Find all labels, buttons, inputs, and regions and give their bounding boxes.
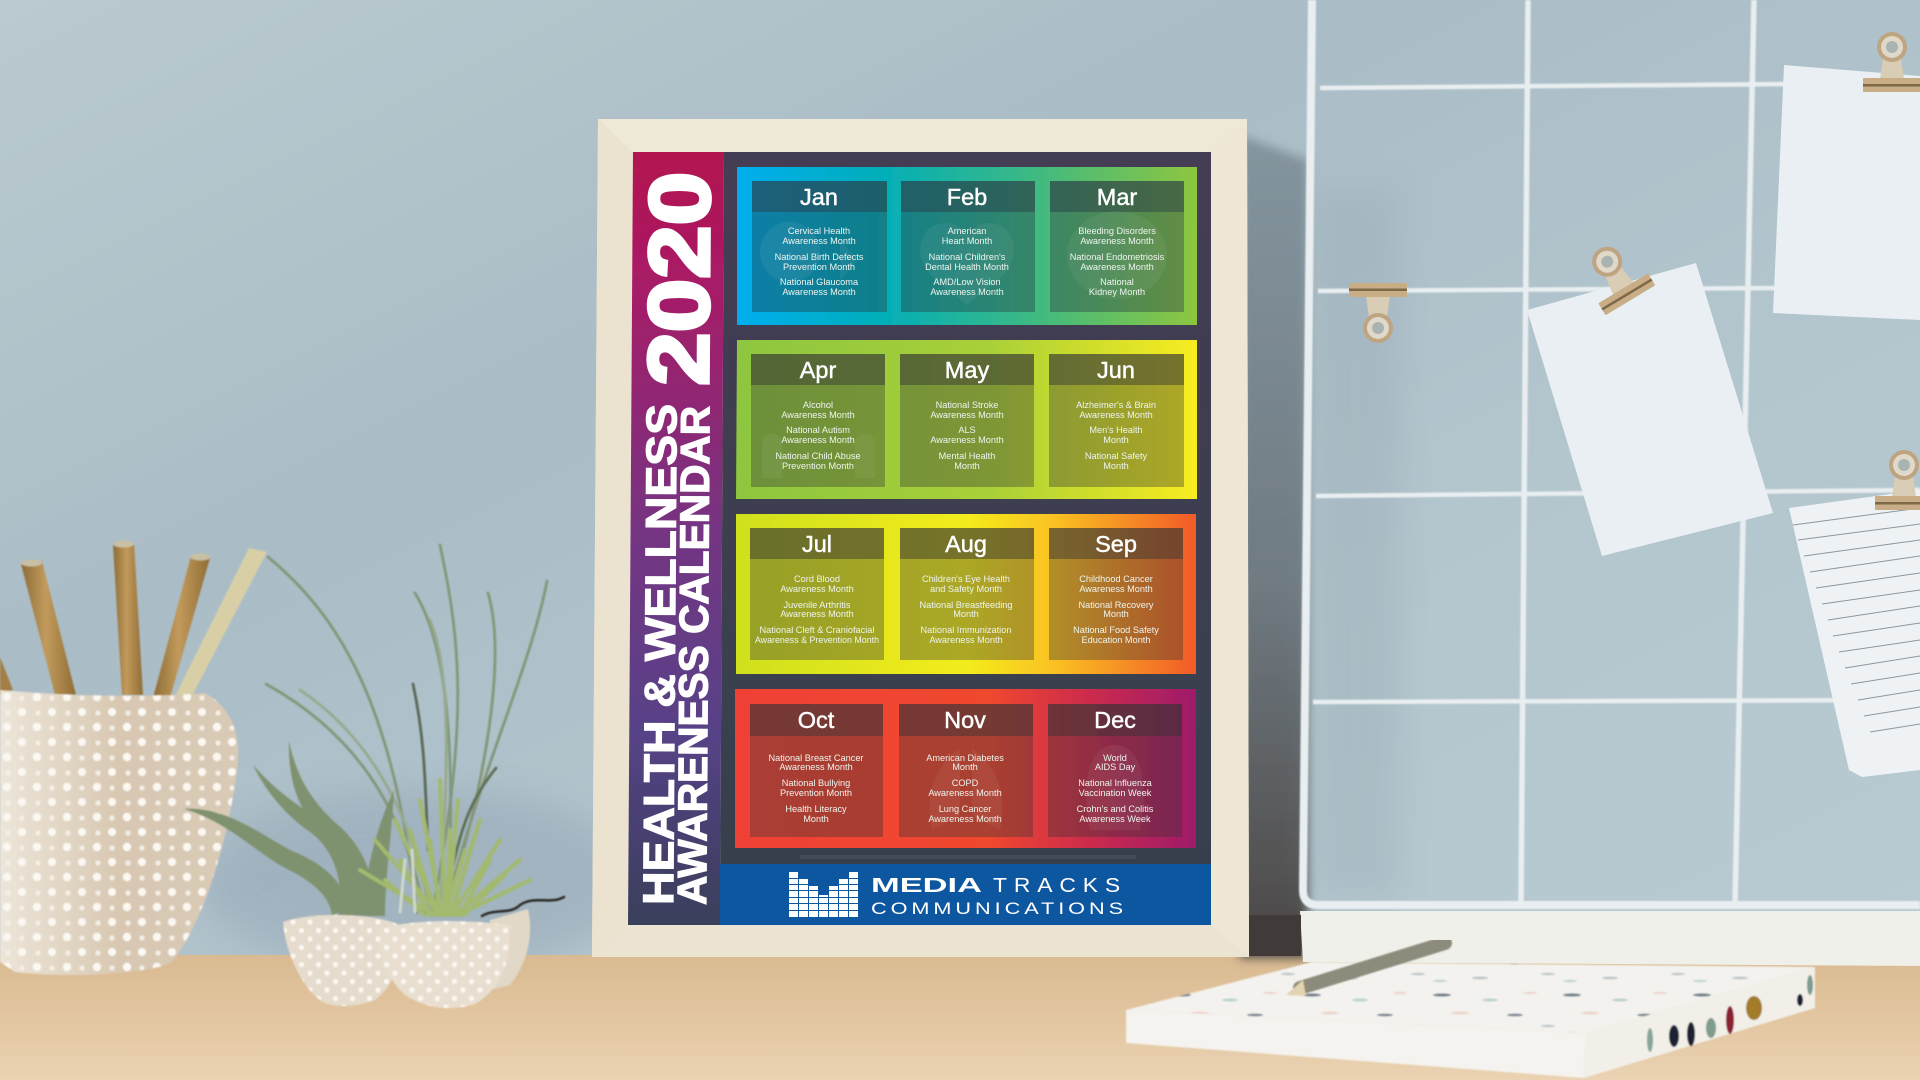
card: October: National Bullying <box>782 778 850 788</box>
card: March: Awareness Month <box>1080 236 1154 246</box>
card: August: and Safety Month <box>930 584 1002 594</box>
wire board: outer frame <box>1303 0 1920 905</box>
card: June: National Safety <box>1085 451 1148 461</box>
card: August: Children's Eye Health <box>922 574 1010 584</box>
card: January: Prevention Month <box>783 262 855 272</box>
card: December: Vaccination Week <box>1079 788 1152 798</box>
picture frame <box>592 119 1249 957</box>
card: June <box>1049 354 1184 487</box>
card: April: Prevention Month <box>782 461 854 471</box>
notebook: spine <box>1584 967 1815 1078</box>
card: May: Mental Health <box>939 451 995 461</box>
blank note: top right <box>1773 65 1920 320</box>
card: November: Awareness Month <box>928 788 1002 798</box>
band: Jul to Sep <box>736 514 1196 674</box>
card: January: National Birth Defects <box>775 252 864 262</box>
clip: left <box>1349 283 1407 343</box>
card: August: National Breastfeeding <box>920 600 1012 610</box>
card: December: Dec <box>1094 707 1136 733</box>
card: January: Cervical Health <box>788 226 850 236</box>
card: May <box>900 354 1034 487</box>
card: July: Awareness Month <box>780 609 854 619</box>
card: April: Alcohol <box>803 400 833 410</box>
card: September: Childhood Cancer <box>1079 574 1153 584</box>
plant: thin leaves <box>266 545 547 913</box>
card: December <box>1048 704 1182 837</box>
card: May: National Stroke <box>936 400 998 410</box>
card: September: Month <box>1103 609 1129 619</box>
card: October: National Breast Cancer <box>769 753 863 763</box>
card: February: Awareness Month <box>930 287 1004 297</box>
card: February: American <box>948 226 986 236</box>
pencil on notebook <box>1286 943 1445 996</box>
fine print strip <box>800 855 1136 859</box>
memo board base block <box>1300 911 1920 966</box>
frame shadow on wall <box>1240 135 1308 958</box>
card: February: Heart Month <box>942 236 992 246</box>
card: October: Month <box>803 814 829 824</box>
card: July: Awareness & Prevention Month <box>755 635 879 645</box>
card: July: Juvenile Arthritis <box>784 600 851 610</box>
wire memo board <box>1303 0 1920 905</box>
poster <box>628 152 1211 925</box>
card: February: Feb <box>947 184 987 210</box>
plant: thick silver leaves <box>184 741 394 916</box>
card: December: World <box>1103 753 1127 763</box>
card: July <box>750 528 884 660</box>
card: April: Awareness Month <box>781 435 855 445</box>
card: May: ALS <box>958 425 976 435</box>
dotted pot <box>0 690 238 975</box>
card: July: Awareness Month <box>780 584 854 594</box>
card: January: National Glaucoma <box>780 277 859 287</box>
card: March: National <box>1100 277 1134 287</box>
card: March: Kidney Month <box>1089 287 1145 297</box>
desk <box>0 955 1920 1080</box>
card: June: Jun <box>1097 357 1135 383</box>
card: May: May <box>945 357 989 383</box>
lined note card <box>1789 490 1920 777</box>
card: February: National Children's <box>929 252 1006 262</box>
pen tips <box>21 540 210 566</box>
title line 2: AWARENESS CALENDAR <box>669 406 718 905</box>
dark gap below shadow <box>1249 915 1301 956</box>
card: October: Oct <box>798 707 835 733</box>
card: February <box>901 181 1035 312</box>
card: November: American Diabetes <box>926 753 1004 763</box>
band: Oct to Dec <box>735 689 1196 848</box>
card: August: Awareness Month <box>929 635 1003 645</box>
card: September: National Recovery <box>1078 600 1154 610</box>
planter: back bowl <box>490 909 530 990</box>
plant: dark tendril <box>482 897 564 916</box>
card: November: Month <box>952 762 978 772</box>
card: April: National Autism <box>786 425 850 435</box>
logo: wordmark: MEDIA <box>871 875 982 897</box>
clip: top right <box>1863 32 1920 92</box>
card: February: Dental Health Month <box>925 262 1009 272</box>
wire board: vertical wires <box>1521 0 1754 905</box>
poster background <box>720 152 1211 925</box>
card: July: Jul <box>802 531 832 557</box>
card: June: Men's Health <box>1089 425 1143 435</box>
logo: wordmark: TRACKS <box>993 875 1127 897</box>
card: May: Awareness Month <box>930 410 1004 420</box>
card: March: Mar <box>1097 184 1137 210</box>
air plant <box>184 545 564 916</box>
card: December: AIDS Day <box>1095 762 1136 772</box>
clip: centre note <box>1575 234 1655 315</box>
card: November: Awareness Month <box>928 814 1002 824</box>
logo: wordmark: COMMUNICATIONS <box>871 900 1127 918</box>
band: Apr to Jun <box>736 340 1197 499</box>
card: December: Crohn's and Colitis <box>1077 804 1154 814</box>
card: August <box>900 528 1034 660</box>
card: August: Aug <box>945 531 987 557</box>
card: April: National Child Abuse <box>775 451 861 461</box>
card: September: National Food Safety <box>1073 625 1159 635</box>
card: September <box>1049 528 1183 660</box>
clip: lower right <box>1875 450 1920 510</box>
plant: pale stems <box>400 850 415 912</box>
card: January: Awareness Month <box>782 236 856 246</box>
soft shadow beside frame <box>1310 190 1400 900</box>
band: Jan to Mar <box>737 167 1197 325</box>
sidebar <box>628 152 728 925</box>
card: September: Education Month <box>1082 635 1150 645</box>
plant: central green tuft <box>360 780 530 915</box>
card: October <box>750 704 883 837</box>
card: August: Month <box>953 609 979 619</box>
year: 2020 <box>631 171 728 386</box>
notebook <box>1126 962 1815 1078</box>
pens in pot <box>0 540 267 698</box>
card: June: Month <box>1103 435 1129 445</box>
card: March: Bleeding Disorders <box>1078 226 1156 236</box>
card: April: Apr <box>800 357 836 383</box>
card: November <box>899 704 1033 837</box>
card: June: Awareness Month <box>1079 410 1153 420</box>
card: October: Health Literacy <box>785 804 847 814</box>
card: May: Awareness Month <box>930 435 1004 445</box>
notebook: page block <box>1126 1010 1586 1078</box>
card: June: Month <box>1103 461 1129 471</box>
card: July: Cord Blood <box>794 574 840 584</box>
card: December: National Influenza <box>1078 778 1153 788</box>
card: November: Lung Cancer <box>939 804 991 814</box>
card: October: Prevention Month <box>780 788 852 798</box>
card: May: Month <box>954 461 980 471</box>
blank note: tilted <box>1527 263 1773 556</box>
wall shadow: behind plant and pot <box>200 790 640 970</box>
card: January: Awareness Month <box>782 287 856 297</box>
planter: left bowl <box>283 915 400 1006</box>
card: November: COPD <box>952 778 979 788</box>
card: January <box>752 181 887 312</box>
card: November: Nov <box>944 707 986 733</box>
card: June: Alzheimer's & Brain <box>1076 400 1156 410</box>
card: August: National Immunization <box>921 625 1011 635</box>
small dotted planter <box>283 909 530 1008</box>
title line 1: HEALTH & WELLNESS <box>635 404 686 905</box>
logo: wordmark <box>871 875 1127 918</box>
card: April: Awareness Month <box>781 410 855 420</box>
card: July: National Cleft & Craniofacial <box>760 625 874 635</box>
card: April <box>751 354 885 487</box>
planter: right bowl <box>378 921 510 1008</box>
card: March <box>1050 181 1184 312</box>
card: February: AMD/Low Vision <box>933 277 1001 287</box>
card: September: Awareness Month <box>1079 584 1153 594</box>
logo: equalizer mark <box>789 872 858 917</box>
card: December: Awareness Week <box>1079 814 1151 824</box>
notebook: cover <box>1126 962 1815 1033</box>
wire board: horizontal wires <box>1313 84 1920 702</box>
footer: logo band <box>720 864 1211 925</box>
card: March: Awareness Month <box>1080 262 1154 272</box>
card: September: Sep <box>1095 531 1137 557</box>
card: January: Jan <box>800 184 838 210</box>
card: October: Awareness Month <box>779 762 853 772</box>
card: March: National Endometriosis <box>1070 252 1165 262</box>
